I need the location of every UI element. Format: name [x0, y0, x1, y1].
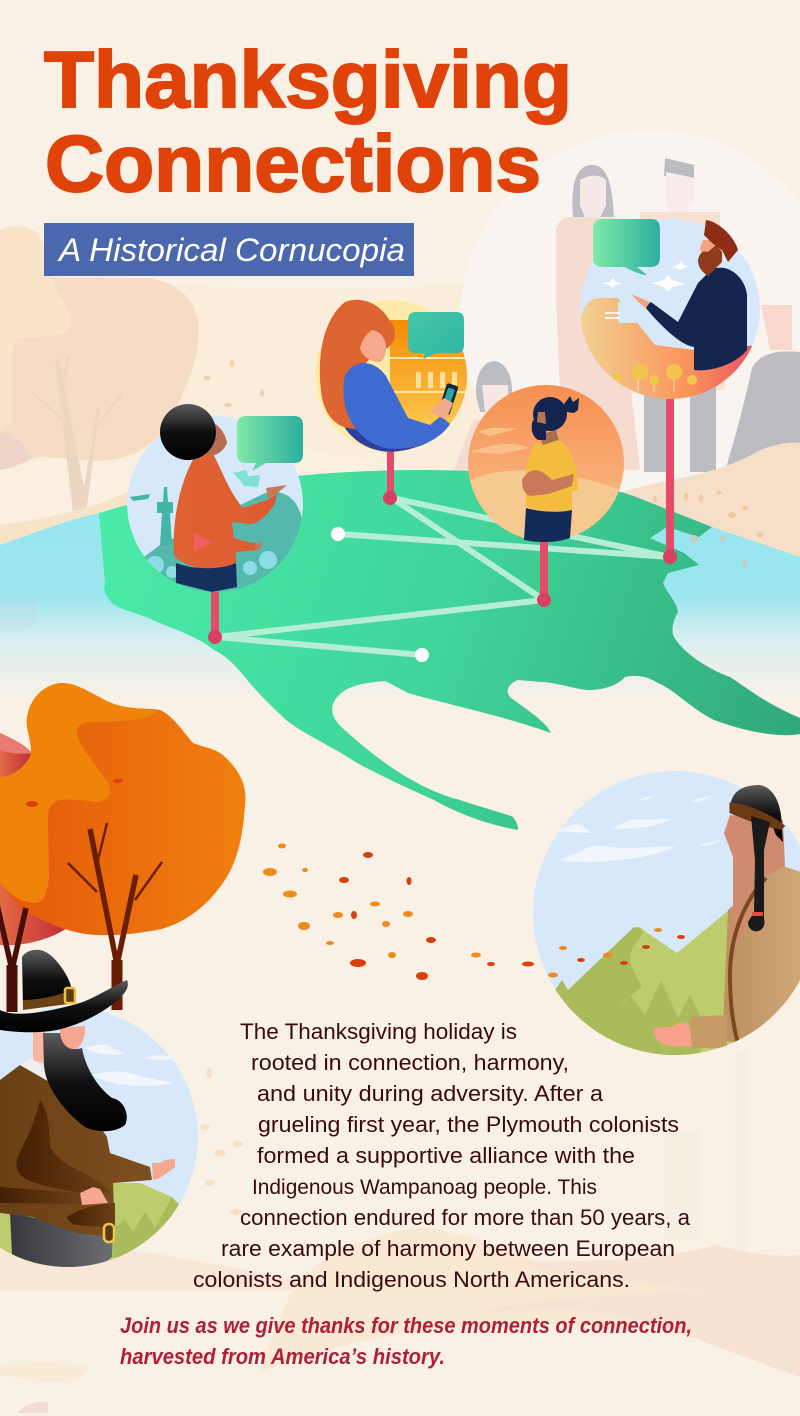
body text: rooted in connection, harmony, [251, 1050, 569, 1075]
network lines [216, 498, 670, 655]
subtitle banner [44, 223, 414, 276]
native man circle [533, 771, 800, 1060]
north america land [99, 470, 800, 830]
pin 4: man with beard [580, 219, 760, 564]
title: Thanksgiving [44, 35, 572, 124]
body text: The Thanksgiving holiday is [240, 1019, 517, 1044]
floating leaves right [653, 491, 762, 567]
body text [193, 1019, 691, 1292]
bubble 2 [408, 312, 464, 359]
closing call to action [120, 1313, 692, 1369]
bubble 4 [593, 219, 660, 275]
hill right [560, 443, 800, 570]
scattered leaves [263, 844, 534, 980]
globe ocean [0, 480, 800, 705]
body text: rare example of harmony between European [221, 1236, 675, 1261]
crowd of faded people [452, 130, 800, 510]
body text: grueling first year, the Plymouth colonists [258, 1112, 679, 1137]
body text: connection endured for more than 50 years, a [240, 1205, 691, 1230]
leaves left of people [204, 359, 264, 407]
pin 2: woman with phone [315, 300, 470, 505]
closing call to action: harvested from America’s history. [120, 1344, 445, 1369]
bubble 1 [237, 416, 303, 471]
closing call to action: Join us as we give thanks for these moments of connection, [120, 1313, 692, 1338]
background hills top [0, 226, 800, 560]
pilgrim circle [0, 950, 200, 1275]
autumn trees [0, 683, 245, 1012]
body text: formed a supportive alliance with the [257, 1143, 635, 1168]
title [44, 35, 572, 208]
title: Connections [45, 119, 541, 208]
network end dots [331, 527, 429, 662]
pin 1: person in orange [127, 404, 303, 644]
subtitle banner: A Historical Cornucopia [57, 232, 405, 268]
bottom sand hills [0, 1050, 800, 1413]
faint leaves beside text [200, 1068, 243, 1215]
body text: colonists and Indigenous North Americans. [193, 1267, 630, 1292]
body text: and unity during adversity. After a [257, 1081, 604, 1106]
body text: Indigenous Wampanoag people. This [252, 1176, 597, 1199]
faint rock at left of ocean [0, 600, 36, 632]
pin 3: person with crossed arms [468, 385, 625, 607]
